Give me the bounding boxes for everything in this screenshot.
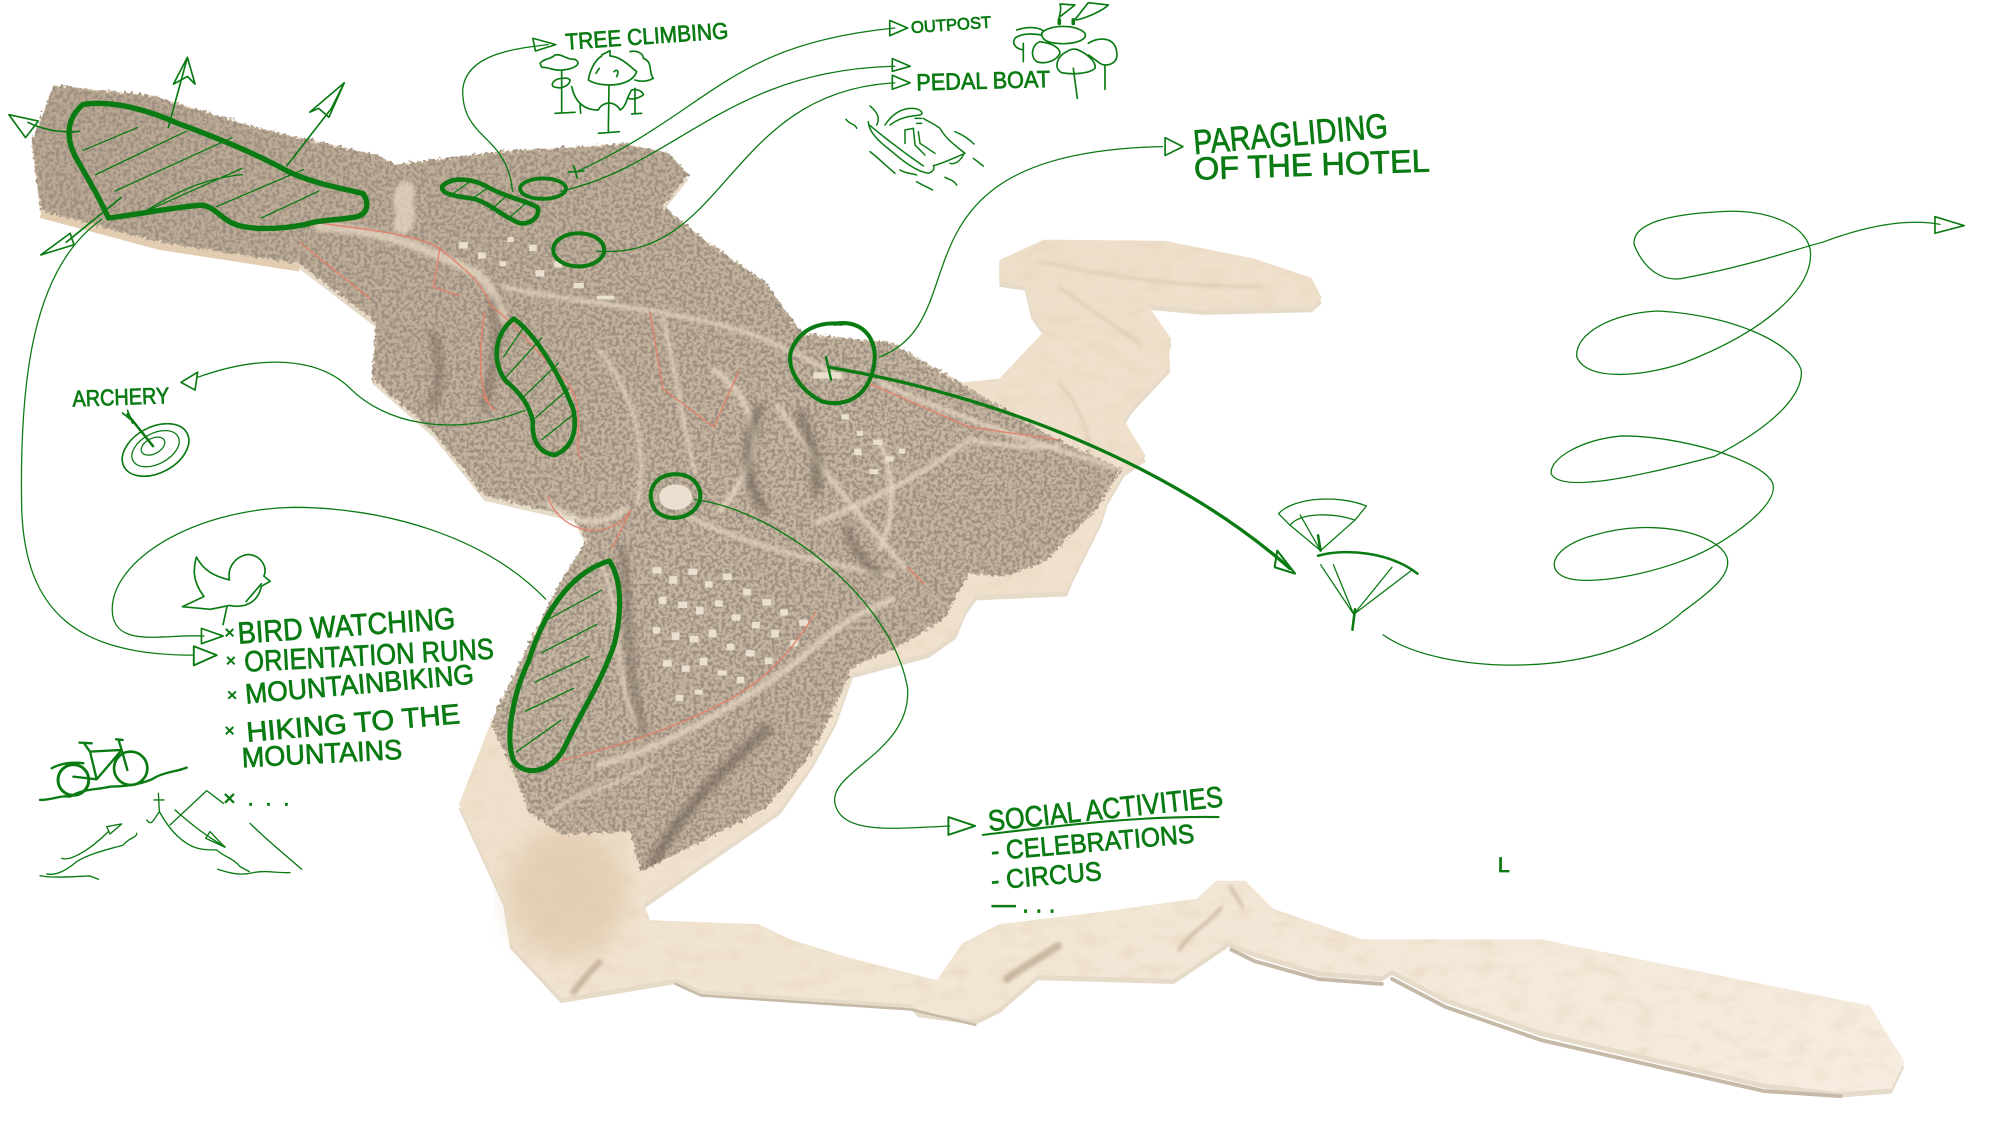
strip under forest edge bbox=[41, 214, 300, 268]
label: outpost: OUTPOST bbox=[910, 13, 992, 37]
icon: outpost treehouse bbox=[1014, 3, 1117, 98]
activity list: HIKING TO THE bbox=[245, 698, 461, 748]
label: social activities list: — . . . bbox=[992, 891, 1055, 919]
arrow: pedal boat outer bbox=[561, 59, 910, 191]
icon: trees and figures bbox=[540, 51, 653, 133]
label: paragliding of the hotel: PARAGLIDING bbox=[1192, 107, 1389, 162]
forest surface bbox=[32, 85, 1122, 872]
label: social activities list: - CIRCUS bbox=[990, 856, 1103, 896]
annotation: archery zone bbox=[497, 319, 575, 455]
arrow: outpost bbox=[569, 20, 908, 178]
activity list: × bbox=[226, 651, 236, 671]
trails bbox=[300, 223, 1058, 762]
activity list: MOUNTAINBIKING bbox=[244, 659, 475, 710]
thick arrow to paragliders bbox=[826, 357, 1295, 574]
social activities site bbox=[659, 484, 692, 510]
village houses bbox=[459, 237, 905, 701]
underline bbox=[983, 817, 1219, 835]
annotation: social activities circle bbox=[651, 474, 700, 518]
arrow: archery bbox=[181, 362, 525, 425]
icon: archery target bbox=[113, 410, 198, 487]
annotation: pedal boat circle bbox=[553, 233, 604, 266]
arrow: paragliding bbox=[880, 138, 1183, 357]
arrow: bird watching bbox=[112, 507, 546, 644]
hatching bbox=[83, 127, 319, 218]
arrow: tree climbing bbox=[463, 38, 556, 191]
activity list: × bbox=[227, 685, 237, 705]
label: social activities list bbox=[983, 781, 1224, 919]
annotation: outpost circle bbox=[520, 178, 566, 199]
arrows leaving the forest zone bbox=[9, 57, 344, 255]
paragliding spiral flight path bbox=[1383, 211, 1964, 665]
annotation: hotel circle bbox=[790, 323, 875, 403]
activity list: ORIENTATION RUNS bbox=[243, 633, 495, 679]
rock shading bbox=[574, 261, 1262, 992]
icon: paragliders bbox=[1279, 499, 1417, 630]
label: social activities list: - CELEBRATIONS bbox=[990, 819, 1195, 866]
arrow: social activities bbox=[695, 500, 975, 835]
annotation: bird watching zone bbox=[510, 561, 620, 771]
activity list: MOUNTAINS bbox=[241, 734, 403, 773]
arrow: orientation runs bbox=[21, 219, 217, 665]
activity list: × bbox=[224, 721, 235, 741]
label: paragliding of the hotel bbox=[1192, 107, 1430, 187]
activity list: × . . . bbox=[223, 786, 289, 811]
icon: bird bbox=[182, 554, 270, 625]
label: archery: ARCHERY bbox=[72, 382, 170, 412]
label: paragliding of the hotel: OF THE HOTEL bbox=[1193, 143, 1430, 187]
label: social activities list: SOCIAL ACTIVITIES bbox=[986, 781, 1224, 838]
label: pedal boat: PEDAL BOAT bbox=[916, 66, 1050, 95]
wall shadows on the long spit bbox=[676, 950, 1841, 1096]
label: tree climbing: TREE CLIMBING bbox=[565, 17, 729, 55]
activity list bbox=[223, 602, 495, 811]
icon: mountains bbox=[40, 791, 302, 879]
stray mark: letter L: L bbox=[1498, 852, 1510, 877]
activity list: × bbox=[224, 623, 235, 643]
arrow: pedal boat bbox=[597, 75, 910, 252]
icon: mountain bike bbox=[40, 739, 187, 800]
valleys, shadows and roads bbox=[319, 191, 1122, 869]
activity list: BIRD WATCHING bbox=[237, 602, 456, 651]
tan rock patch bbox=[506, 826, 628, 959]
icon: pedal boat bbox=[846, 106, 983, 190]
annotation: hatched forest zone upper left bbox=[69, 103, 367, 228]
annotation: hatched zone near tree climbing bbox=[442, 180, 538, 223]
